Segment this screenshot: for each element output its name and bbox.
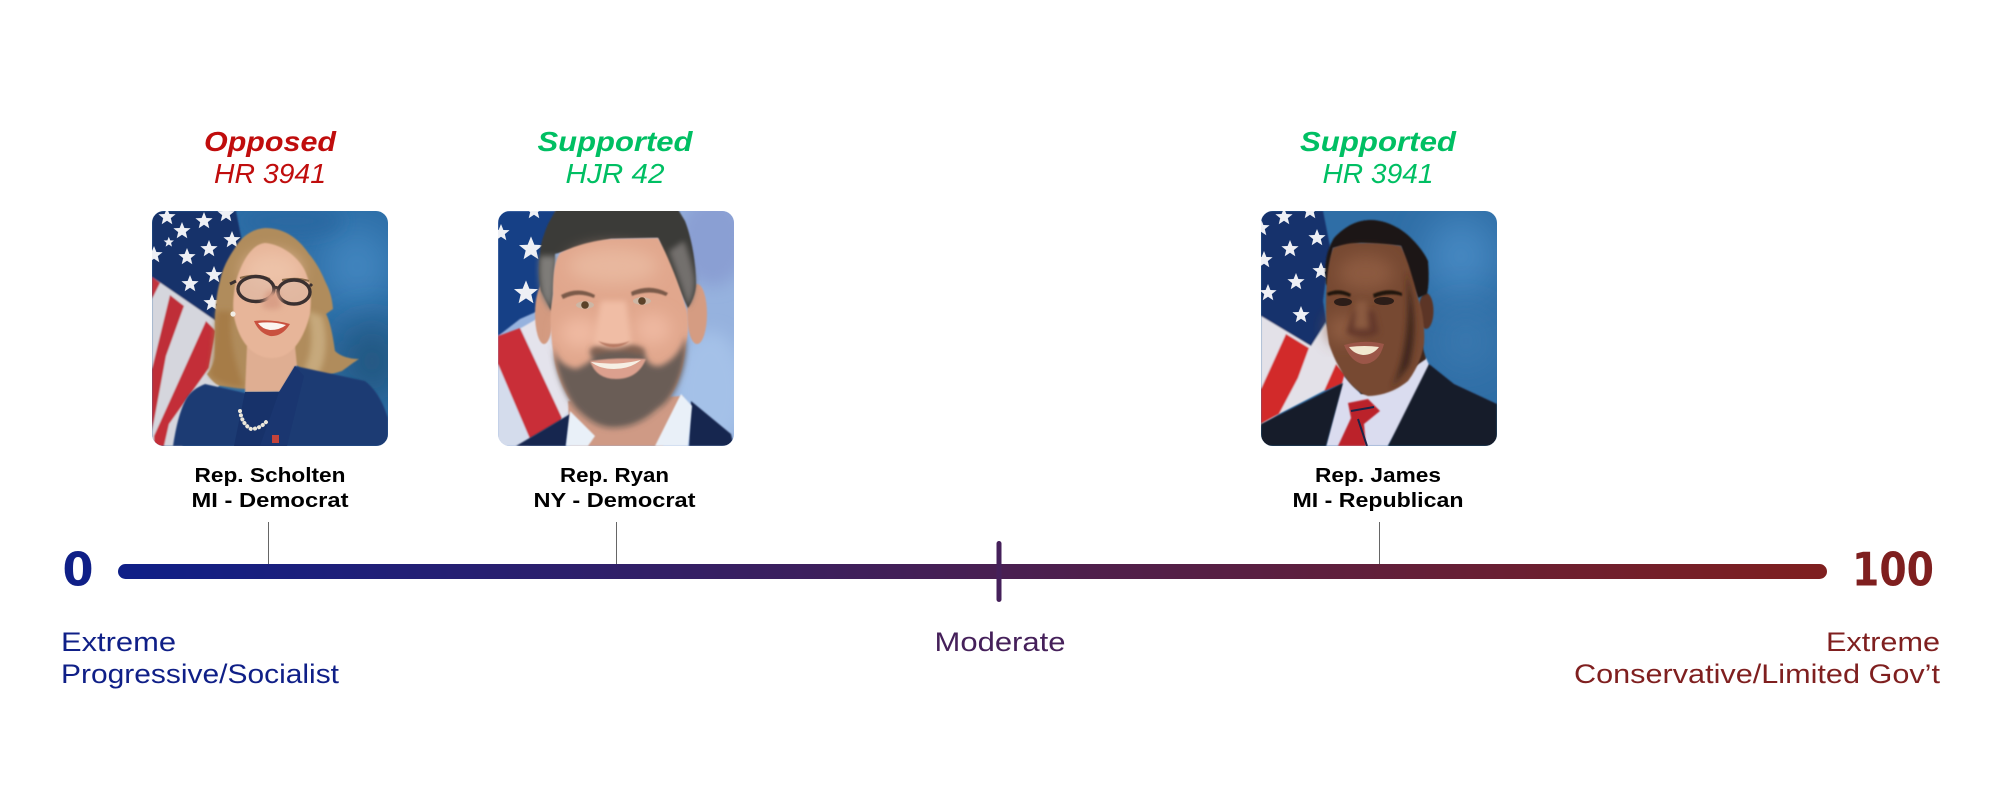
name: Rep. James, MI - Republican: Rep. James	[1315, 465, 1441, 487]
vote label: Supported HJR 42: HJR 42	[566, 158, 664, 189]
name: Rep. Scholten, MI - Democrat	[192, 465, 349, 512]
scale minimum: 0: 0	[62, 542, 94, 596]
name: Rep. Scholten, MI - Democrat: MI - Democrat	[192, 490, 349, 512]
vote label: Supported HR 3941	[1300, 126, 1457, 189]
label: Extreme Progressive/Socialist	[61, 627, 340, 689]
panel: Rep. Scholten	[152, 131, 388, 507]
name: Rep. Ryan, NY - Democrat	[534, 465, 696, 512]
portrait: Rep. Scholten	[152, 211, 388, 446]
portrait: Rep. James	[1252, 202, 1497, 446]
vote label: Opposed HR 3941: HR 3941	[214, 158, 326, 189]
vote label: Opposed HR 3941: Opposed	[204, 126, 337, 157]
position marker: Rep. James	[1379, 522, 1380, 564]
label: Extreme Progressive/Socialist: Extreme	[61, 627, 176, 657]
scale bar: gradient from progressive to conservative	[118, 564, 1827, 579]
label: Moderate: Moderate	[934, 627, 1066, 657]
panel: Rep. Ryan	[498, 131, 734, 507]
label: Extreme Conservative/Limited Gov't: Conservative/Limited Gov’t	[1574, 659, 1941, 689]
name: Rep. James, MI - Republican: MI - Republican	[1292, 490, 1464, 512]
scale maximum: 100: 100	[1852, 542, 1934, 596]
moderate midpoint tick	[996, 541, 1002, 602]
name: Rep. Scholten, MI - Democrat: Rep. Scholten	[194, 465, 346, 487]
vote label: Opposed HR 3941	[204, 126, 337, 189]
name: Rep. Ryan, NY - Democrat: NY - Democrat	[534, 490, 696, 512]
label: Extreme Progressive/Socialist: Progressive/Socialist	[61, 659, 340, 689]
panel: Rep. James	[1252, 126, 1497, 512]
vote label: Supported HJR 42	[538, 126, 694, 189]
label: Extreme Conservative/Limited Gov't	[1574, 627, 1941, 689]
name: Rep. Ryan, NY - Democrat: Rep. Ryan	[560, 465, 669, 487]
vote label: Supported HR 3941: Supported	[1300, 126, 1457, 157]
portrait: Rep. Ryan	[498, 211, 734, 446]
vote label: Supported HR 3941: HR 3941	[1322, 158, 1434, 189]
vote label: Supported HJR 42: Supported	[538, 126, 694, 157]
name: Rep. James, MI - Republican	[1292, 465, 1464, 512]
label: Extreme Conservative/Limited Gov't: Extreme	[1826, 627, 1940, 657]
position marker: Rep. Scholten	[268, 522, 269, 564]
position marker: Rep. Ryan	[616, 522, 617, 564]
